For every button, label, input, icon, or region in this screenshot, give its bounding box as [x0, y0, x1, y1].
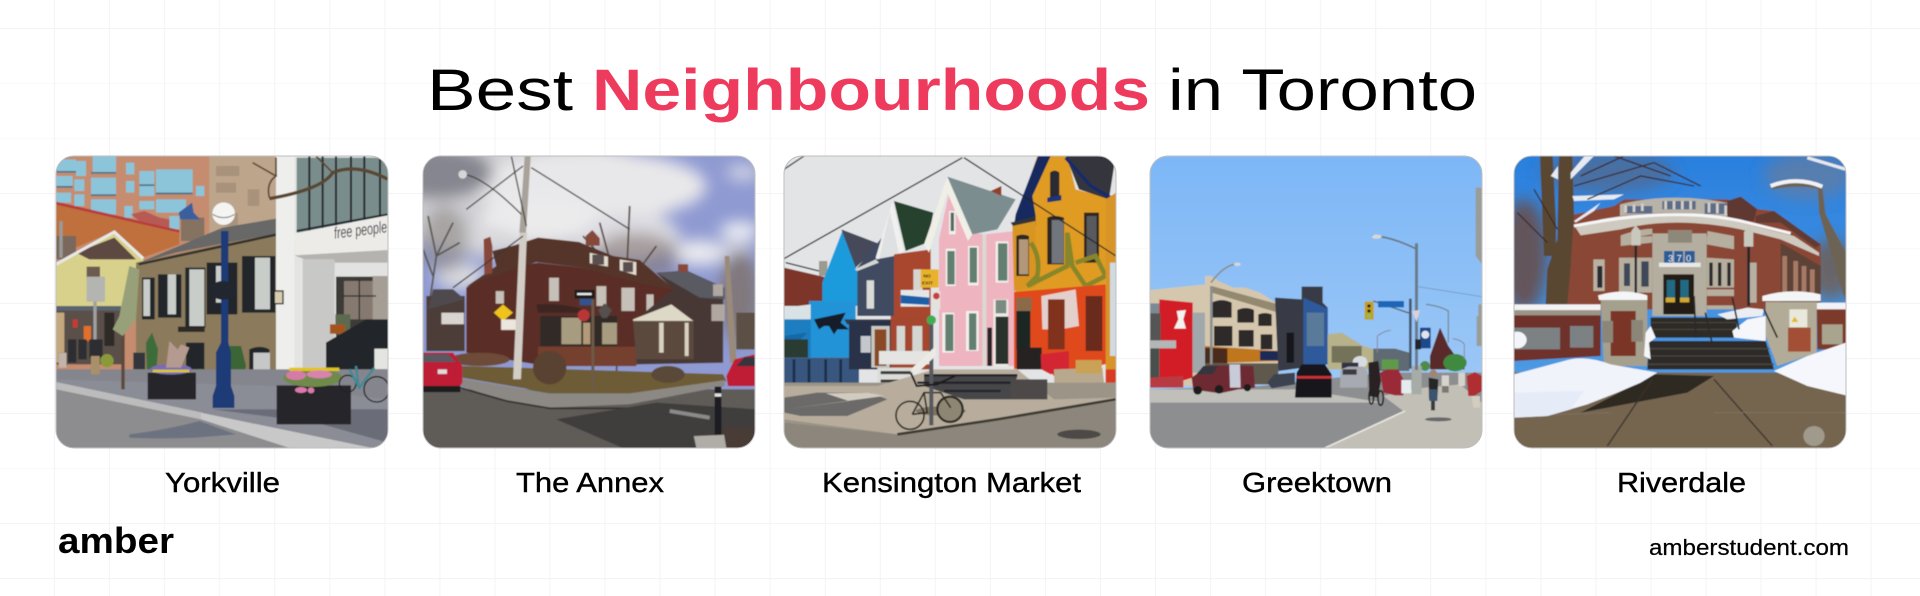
photo: Greektown	[1150, 156, 1482, 448]
title: in Toronto	[1168, 58, 1477, 123]
caption: Greektown: Greektown	[1242, 467, 1392, 498]
caption: Riverdale: Riverdale	[1617, 467, 1746, 498]
caption: The Annex: The Annex	[516, 467, 664, 498]
caption: Yorkville: Yorkville	[165, 467, 280, 498]
title: Best	[427, 58, 573, 123]
photo: Riverdale: 7	[1677, 253, 1682, 263]
photo: Riverdale: 3	[1668, 253, 1673, 263]
website url: amberstudent.com	[1649, 535, 1849, 560]
caption: Kensington Market: Kensington Market	[822, 467, 1081, 498]
title	[427, 58, 1477, 123]
photo: The Annex	[424, 156, 754, 448]
title: Neighbourhoods	[592, 58, 1150, 123]
photo: Kensington Market: NO	[923, 273, 931, 279]
photo: Kensington Market: EXIT	[922, 281, 933, 287]
photo frames	[56, 156, 1846, 448]
photo: Kensington Market	[784, 156, 1116, 448]
photo: Riverdale: 0	[1686, 253, 1691, 263]
photo: Yorkville	[56, 156, 389, 448]
photo: Yorkville: free people	[333, 219, 388, 243]
logo: amber: amber	[58, 520, 174, 561]
photo: Riverdale	[1501, 153, 1854, 448]
